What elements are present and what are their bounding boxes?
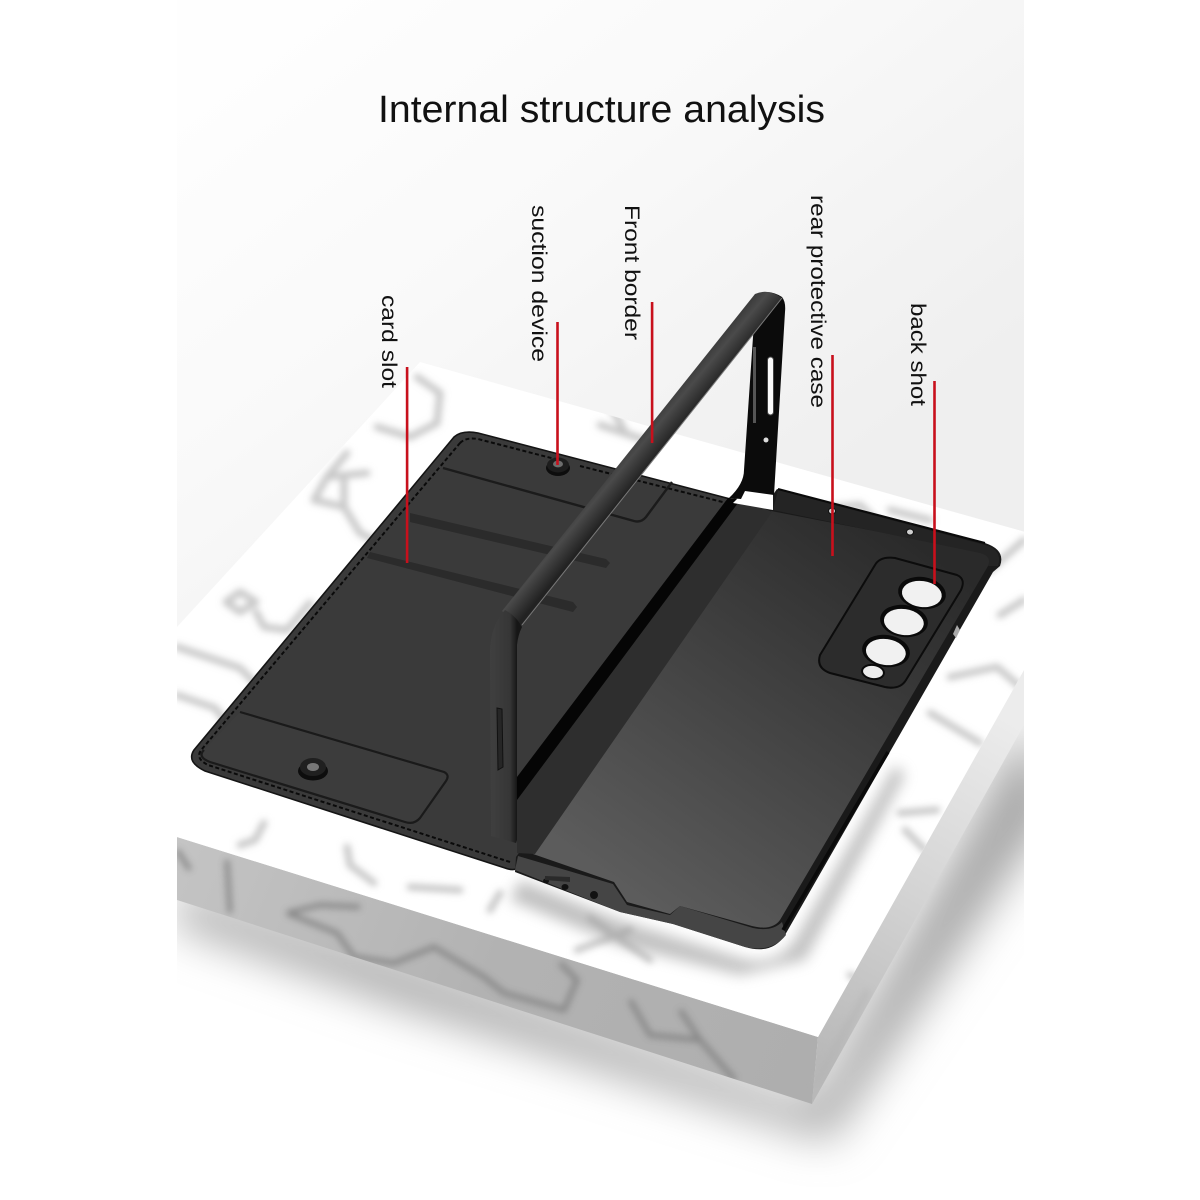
marble block: [177, 362, 1100, 1104]
label: back shot: back shot: [906, 303, 929, 406]
leader line: suction device: [556, 322, 559, 465]
case inner floor: [533, 511, 990, 928]
suction button top: [546, 458, 570, 476]
marble left side face: [177, 837, 818, 1104]
rear protective case: [515, 489, 1001, 949]
marble top face: [177, 362, 1100, 1037]
case bottom rim: [515, 856, 786, 948]
post button slot: [497, 708, 503, 770]
stitching: [199, 438, 770, 862]
bottom port holes: [543, 876, 598, 899]
camera island: [819, 558, 963, 688]
hinge black strip: [517, 498, 741, 800]
label: rear protective case: rear protective case: [806, 195, 829, 408]
lens 3: [860, 632, 912, 670]
back post cutout: [768, 357, 774, 415]
card slot 1: [410, 513, 610, 568]
front post: [490, 610, 522, 843]
card slot 2: [367, 552, 577, 612]
marble right side face: [812, 742, 1014, 1104]
folio: leather card cover: [192, 432, 780, 870]
front border frame: [490, 292, 785, 843]
rim hole right: [906, 529, 914, 535]
label: card slot: card slot: [377, 295, 400, 388]
label: suction device: suction device: [527, 205, 550, 362]
leader line: Front border: [651, 302, 653, 443]
lens 2: [878, 602, 930, 640]
flash: [860, 662, 886, 682]
case right edge: [783, 752, 888, 930]
side button: [953, 625, 960, 638]
leader line: back shot: [933, 381, 936, 584]
top rim of case: [773, 490, 999, 566]
suction button bottom: [298, 758, 328, 780]
hinge shadow band: [517, 498, 772, 854]
back post: [729, 292, 785, 499]
lens 1: [896, 574, 948, 612]
leader line: rear protective case: [831, 355, 834, 556]
rim hole left: [828, 508, 836, 514]
phone shadow on marble: [510, 765, 905, 975]
leader line: card slot: [406, 367, 408, 563]
title: Internal structure analysis: [378, 89, 825, 131]
back post thin slot: [753, 347, 756, 423]
photo backdrop: [177, 0, 1060, 1200]
case outer shell: [515, 489, 1001, 949]
label: Front border: Front border: [620, 205, 643, 340]
white gap behind frame: [733, 493, 773, 510]
bottom magnetic flap: [202, 712, 448, 823]
diagonal bar: [502, 292, 782, 625]
back post hole: [764, 438, 768, 442]
top magnetic flap: [443, 468, 672, 522]
